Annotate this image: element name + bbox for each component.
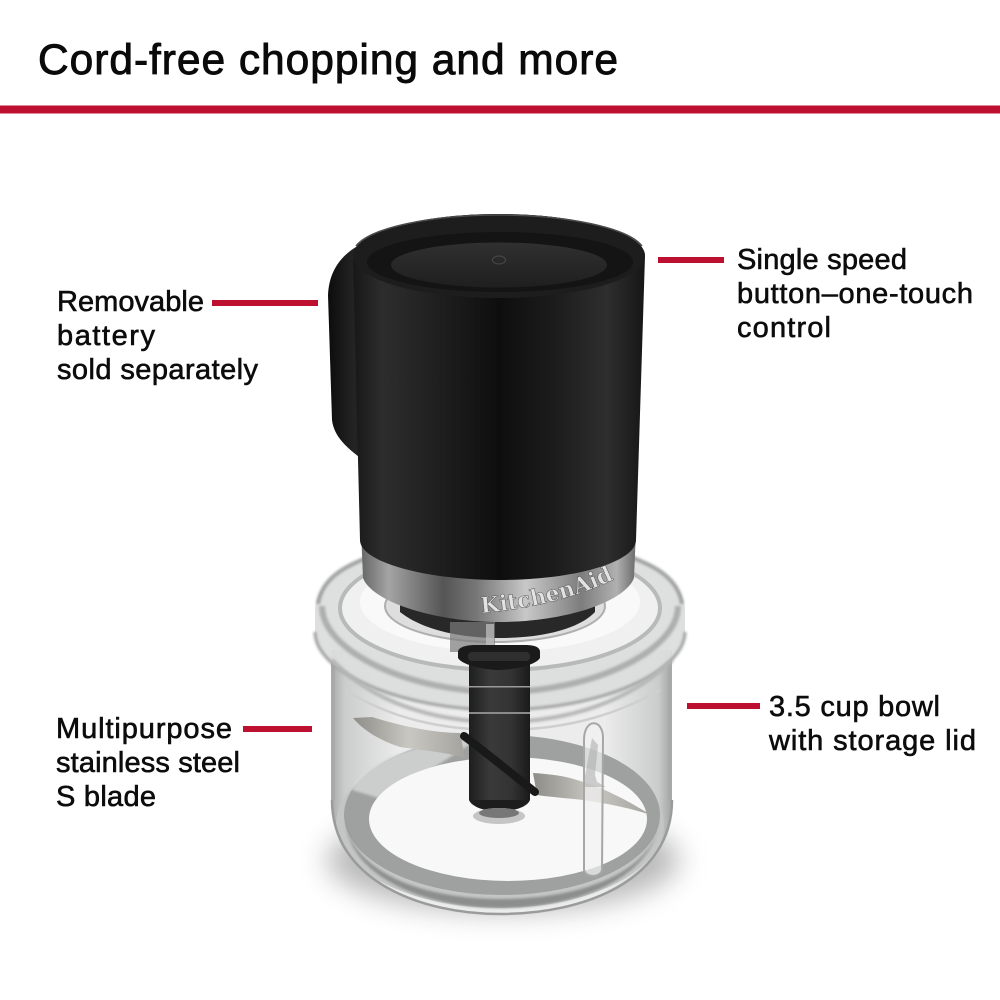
top rim (353, 214, 645, 298)
power button (391, 242, 607, 288)
callout: single speed button (658, 244, 973, 344)
glass bowl (331, 650, 672, 914)
callout: S blade: S blade (56, 781, 156, 813)
bowl finger tab (583, 723, 606, 876)
callout: bowl (687, 691, 976, 757)
power icon (492, 256, 506, 264)
motor coupling (385, 570, 605, 652)
callout: removable battery (57, 286, 318, 386)
callout: S blade: stainless steel (56, 747, 240, 779)
battery pack (328, 240, 372, 466)
bowl base ring (336, 740, 664, 908)
callout: S blade: Multipurpose (56, 713, 232, 745)
callout: removable battery: battery (57, 320, 156, 352)
callout: single speed button: control (737, 312, 831, 344)
steel ring (362, 544, 636, 622)
S blade (353, 717, 651, 815)
callout: removable battery: sold separately (57, 354, 258, 386)
floor shadow (327, 808, 679, 912)
lid (315, 546, 685, 730)
black motor body (353, 214, 645, 580)
callout: S blade (56, 713, 312, 813)
callout: bowl: 3.5 cup bowl (769, 691, 940, 723)
red header rule (0, 106, 1000, 114)
title: Cord-free chopping and more (38, 37, 618, 84)
callout: bowl: with storage lid (768, 725, 976, 757)
callout: single speed button: button–one-touch (737, 278, 973, 310)
KitchenAid logo: KitchenAid (480, 565, 614, 614)
callout: single speed button: Single speed (737, 244, 907, 276)
white bowl floor (369, 757, 647, 881)
callout: removable battery: Removable (57, 286, 204, 318)
product: chopper (312, 214, 690, 928)
blade shaft (458, 645, 540, 824)
